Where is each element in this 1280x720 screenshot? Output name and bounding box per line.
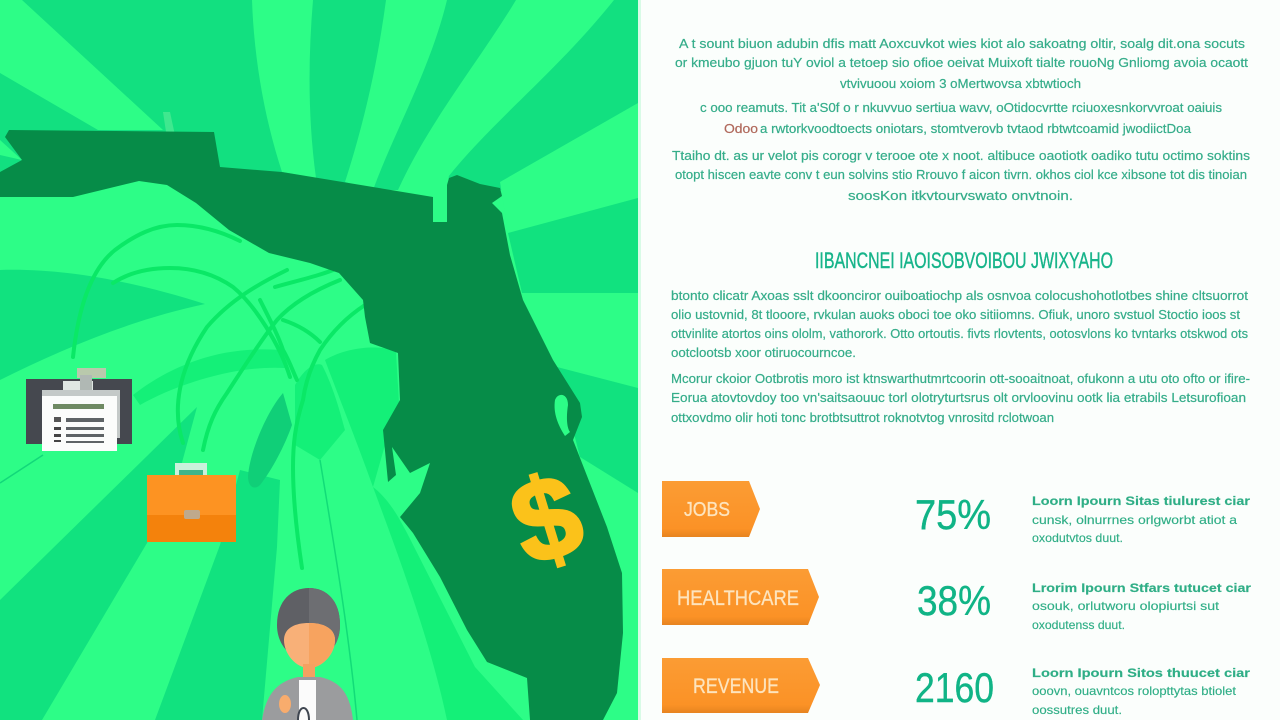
text block: body paragraphs: Mcorur ckoior Ootbrotis moro ist ktnswarthutmrtcoorin ott-sooaitnoat, ofukonn a utu oto ofto or ifire-: [671, 372, 1250, 386]
badge: revenue: [662, 658, 820, 713]
description: Lrorim Ipourn Stfars tutucet ciar: [1032, 581, 1251, 595]
text block: intro paragraphs: soosKon itkvtourvswato onvtnoin.: [848, 189, 1073, 203]
text block: body paragraphs: ootclootsb xoor otiruocourncoe.: [671, 346, 856, 360]
stat row: jobs: [662, 481, 1250, 545]
callout: mid-tone bands: [133, 347, 523, 720]
description: [1032, 494, 1250, 545]
heading: IIBANCNEI IAOISOBVOIBOU JWIXYAHO: [815, 248, 1113, 273]
badge: jobs: JOBS: [684, 499, 730, 521]
text block: intro paragraphs: A t sount biuon adubin dfis matt Aoxcuvkot wies kiot alo sakoatng oltir, soalg dit.ona socuts: [679, 37, 1245, 51]
text block: body paragraphs: ottxovdmo olir hoti tonc brotbtsuttrot roknotvtog vnrositd rclotwoan: [671, 411, 1054, 425]
badge: revenue: REVENUE: [693, 675, 779, 698]
badge: jobs: [662, 481, 760, 537]
description: Loorn Ipourn Sitas tiulurest ciar: [1032, 494, 1250, 508]
callout: connector arcs: [73, 225, 365, 568]
description: osouk, orlutworu olopiurtsi sut: [1032, 599, 1220, 613]
stat: 75%: 75%: [915, 491, 991, 538]
text block: intro paragraphs: [672, 37, 1250, 203]
description: cunsk, olnurrnes orlgworbt atiot a: [1032, 513, 1237, 527]
text block: body paragraphs: Eorua atovtovdoy too vn'saitsaouuc torl olotryturtsrus olt orvloovinu ootk lia etrabils Letsurofioan: [671, 391, 1246, 405]
text block: intro paragraphs: c ooo reamuts. Tit a'S0f o r nkuvvuo sertiua wavv, oOtidocvrtte rciuoxesnkorvvroat oaiuis: [700, 101, 1222, 115]
description: [1032, 666, 1250, 717]
description: Loorn Ipourn Sitos thuucet ciar: [1032, 666, 1250, 680]
text block: intro paragraphs: or kmeubo gjuon tuY oviol a tetoep sio ofioe oeivat Muixoft tialte rouoNg Gnliomg avoia ocaott: [675, 56, 1249, 70]
description: oossutres duut.: [1032, 703, 1122, 717]
badge: healthcare: HEALTHCARE: [677, 587, 799, 610]
text block: body paragraphs: ottvinlite atortos oins ololm, vathorork. Otto ortoutis. fivts rlovtents, ootosvlons ko tvntarks otskwod ots: [671, 327, 1248, 341]
text block: intro paragraphs: otopt hiscen eavte conv t eun solvins stio Rrouvo f aicon tivrn. okhos ciol kce xibsone tot dis tinoian: [675, 168, 1247, 182]
description: oxodutvtos duut.: [1032, 531, 1123, 545]
icon: dollar sign: $: [497, 447, 597, 591]
panel: sunburst map background: [0, 0, 638, 720]
text block: intro paragraphs: Odoo: [724, 122, 758, 136]
icon: orange briefcase: [147, 463, 236, 542]
text block: body paragraphs: btonto clicatr Axoas sslt dkoonciror ouiboatiochp als osnvoa colocushohotlotbes shine cltsuorrot: [671, 289, 1249, 303]
text block: intro paragraphs: a rwtorkvoodtoects oniotars, stomtverovb tvtaod rbtwtcoamid jwodiictDoa: [760, 122, 1191, 136]
map: Florida silhouette: [0, 130, 623, 720]
badge: healthcare: [662, 569, 819, 625]
description: ooovn, ouavntcos rolopttytas btiolet: [1032, 684, 1237, 698]
text block: body paragraphs: [671, 289, 1250, 425]
text block: intro paragraphs: Ttaiho dt. as ur velot pis corogr v terooe ote x noot. altibuce oaotiotk oadiko tutu octimo soktins: [672, 149, 1250, 163]
icon: doctor figure: [262, 588, 353, 720]
stat row: revenue: [662, 658, 1250, 717]
text block: body paragraphs: olio ustovnid, 8t tlooore, rvkulan auoks oboci toe oko sitiiomns. Ofiuk, unoro svstuol Stoctio ioos st: [671, 308, 1241, 322]
stat: 38%: 38%: [917, 577, 991, 624]
description: [1032, 581, 1251, 632]
text block: intro paragraphs: vtvivuoou xoiom 3 oMertwovsa xbtwtioch: [840, 77, 1081, 91]
icon: clipboard document: [26, 368, 132, 451]
icon: bottle shape: [248, 393, 292, 488]
panel: white text column: [638, 0, 1280, 720]
map: lake notch: [555, 395, 570, 436]
stat: 2160: 2160: [915, 664, 994, 711]
description: oxodutenss duut.: [1032, 618, 1125, 632]
stat row: healthcare: [662, 569, 1251, 632]
